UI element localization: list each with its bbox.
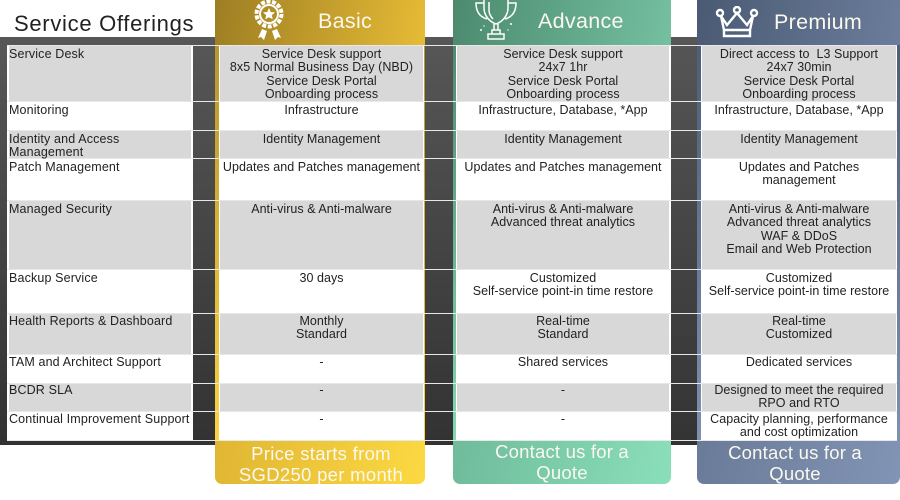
heading: advance: Advance — [538, 9, 624, 33]
advance cell: Real-time — [536, 314, 590, 328]
icon: crown — [716, 6, 758, 38]
row: TAM and architect support — [9, 355, 852, 369]
basic cell — [220, 314, 423, 354]
advance cell — [457, 384, 669, 411]
advance cell — [457, 102, 669, 130]
basic cell — [220, 355, 423, 383]
footer: basic price: Price starts from — [251, 443, 391, 464]
premium cell: Service Desk Portal — [744, 74, 854, 88]
row: BCDR SLA — [9, 383, 896, 411]
icon: trophy — [475, 0, 517, 40]
advance cell: Infrastructure, Database, *App — [478, 103, 648, 117]
premium cell: Designed to meet the required — [714, 383, 884, 397]
row: identity and access management — [9, 131, 896, 159]
footer: advance quote: Quote — [536, 462, 588, 482]
premium cell: RPO and RTO — [758, 396, 840, 410]
label — [9, 355, 191, 383]
basic cell: Monthly — [299, 314, 344, 328]
basic cell: - — [319, 383, 324, 397]
basic cell: - — [319, 355, 324, 369]
header: basic — [215, 0, 425, 45]
advance cell: Service Desk Portal — [508, 74, 618, 88]
basic cell: Updates and Patches management — [223, 160, 420, 174]
row: backup service — [9, 271, 889, 298]
advance cell: - — [561, 383, 565, 397]
advance cell — [457, 412, 669, 440]
basic cell: Anti-virus & Anti-malware — [251, 202, 392, 216]
row: continual improvement support — [9, 412, 888, 439]
premium cell: Self-service point-in time restore — [709, 284, 889, 298]
basic cell: 30 days — [299, 271, 344, 285]
advance cell — [457, 131, 669, 158]
label — [9, 159, 191, 200]
premium cell: Infrastructure, Database, *App — [714, 103, 884, 117]
premium cell — [702, 384, 896, 411]
advance cell — [457, 314, 669, 354]
footer: advance quote — [453, 441, 671, 484]
premium cell: management — [762, 173, 836, 187]
basic cell: Identity Management — [263, 132, 380, 146]
row: monitoring — [9, 103, 884, 117]
header: premium — [697, 0, 900, 45]
premium cell: Capacity planning, performance — [710, 412, 888, 426]
icon: award rosette — [254, 0, 284, 40]
premium cell — [702, 314, 896, 354]
advance cell: Advanced threat analytics — [491, 215, 635, 229]
table outline: advance column — [456, 45, 671, 441]
row: service desk — [9, 46, 896, 101]
column strip: premium — [697, 45, 900, 441]
row: health reports and dashboard — [9, 314, 896, 354]
advance cell: 24x7 1hr — [539, 60, 587, 74]
premium cell: Identity Management — [740, 132, 858, 146]
premium cell: Onboarding process — [742, 87, 856, 101]
basic cell: Onboarding process — [265, 87, 378, 101]
footer: premium quote: Quote — [769, 462, 821, 484]
advance cell: Standard — [537, 327, 589, 341]
premium cell: Dedicated services — [746, 355, 852, 369]
label: Managed Security — [9, 202, 112, 216]
footer: advance quote: Contact us for a — [495, 441, 629, 462]
advance cell: Self-service point-in time restore — [473, 284, 653, 298]
basic cell: Infrastructure — [284, 103, 359, 117]
label — [9, 46, 191, 101]
advance cell: - — [561, 412, 565, 426]
basic cell — [220, 131, 423, 158]
table outline: premium column — [701, 45, 897, 441]
column strip: advance — [453, 45, 671, 441]
footer: basic price — [215, 441, 425, 484]
label — [9, 384, 191, 411]
basic cell: Standard — [296, 327, 347, 341]
advance cell — [457, 159, 669, 200]
label: BCDR SLA — [9, 383, 73, 397]
advance cell: Updates and Patches management — [464, 160, 662, 174]
premium cell: Updates and Patches — [739, 160, 859, 174]
row: patch management — [9, 160, 859, 187]
label — [9, 131, 191, 158]
label — [9, 314, 191, 354]
premium cell: Customized — [766, 327, 832, 341]
premium cell — [702, 201, 896, 269]
basic cell — [220, 384, 423, 411]
label: Management — [9, 145, 83, 159]
basic cell: Service Desk Portal — [266, 74, 377, 88]
premium cell: 24x7 30min — [766, 60, 832, 74]
advance cell: Shared services — [518, 355, 608, 369]
advance cell: Service Desk support — [503, 47, 623, 61]
premium cell: Anti-virus & Anti-malware — [729, 202, 869, 216]
label: Patch Management — [9, 160, 120, 174]
premium cell: WAF & DDoS — [761, 229, 837, 243]
header: advance — [453, 0, 671, 45]
heading: basic: Basic — [318, 9, 372, 33]
premium cell — [702, 46, 896, 101]
heading: premium: Premium — [774, 10, 862, 34]
basic cell: 8x5 Normal Business Day (NBD) — [230, 60, 413, 74]
label — [9, 201, 191, 269]
premium cell — [702, 159, 896, 200]
premium cell — [702, 102, 896, 130]
table outline: label column — [7, 45, 193, 441]
footer: premium quote: Contact us for a — [728, 442, 862, 463]
premium cell — [702, 131, 896, 158]
dark gap between advance and premium columns — [671, 45, 697, 441]
footer: basic price: SGD250 per month — [239, 464, 403, 484]
advance cell — [457, 201, 669, 269]
title: Service Offerings — [14, 11, 194, 36]
column strip: basic — [215, 45, 425, 441]
premium cell: Customized — [766, 271, 832, 285]
label: Identity and Access — [9, 132, 119, 146]
premium cell: Real-time — [772, 314, 826, 328]
basic cell — [220, 412, 423, 440]
premium cell — [702, 412, 896, 440]
basic cell — [220, 46, 423, 101]
label — [9, 270, 191, 313]
label: Monitoring — [9, 103, 69, 117]
premium cell — [702, 270, 896, 313]
advance cell — [457, 270, 669, 313]
table outline: basic column — [219, 45, 424, 441]
advance cell — [457, 355, 669, 383]
premium cell: Direct access to L3 Support — [720, 47, 878, 61]
premium cell: and cost optimization — [740, 425, 858, 439]
premium cell: Advanced threat analytics — [727, 215, 871, 229]
advance cell: Customized — [530, 271, 596, 285]
label — [9, 102, 191, 130]
advance cell: Anti-virus & Anti-malware — [493, 202, 633, 216]
premium cell — [702, 355, 896, 383]
table grid lines — [7, 45, 897, 441]
label — [9, 412, 191, 440]
label: Continual Improvement Support — [9, 412, 190, 426]
row: managed security — [9, 201, 896, 269]
basic cell — [220, 270, 423, 313]
basic cell — [220, 159, 423, 200]
basic cell: - — [319, 412, 324, 426]
basic cell — [220, 102, 423, 130]
basic cell — [220, 201, 423, 269]
basic cell: Service Desk support — [262, 47, 381, 61]
label: Backup Service — [9, 271, 98, 285]
advance cell: Identity Management — [504, 132, 622, 146]
label: Health Reports & Dashboard — [9, 314, 172, 328]
premium cell: Email and Web Protection — [726, 242, 872, 256]
advance cell — [457, 46, 669, 101]
label: TAM and Architect Support — [9, 355, 161, 369]
footer: premium quote — [697, 441, 900, 484]
advance cell: Onboarding process — [506, 87, 620, 101]
label: Service Desk — [9, 47, 84, 61]
